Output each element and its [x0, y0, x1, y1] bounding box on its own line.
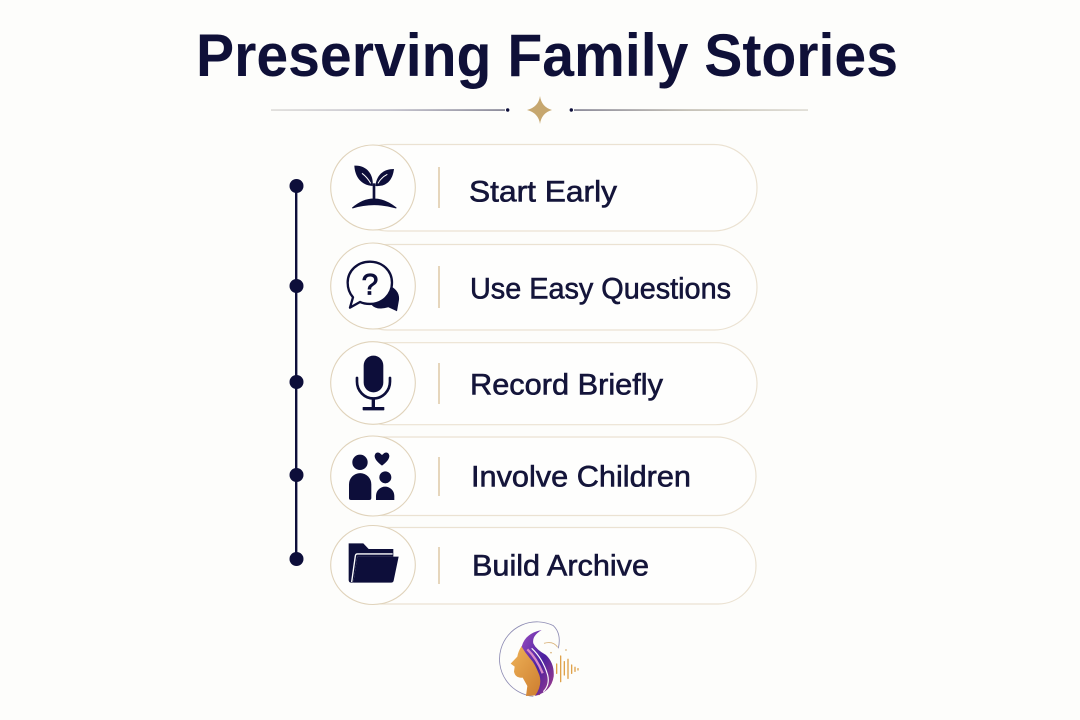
icon: open folder: [349, 543, 399, 583]
timeline: [290, 179, 304, 566]
logo: woman profile with sound wave: [500, 622, 578, 696]
icon: sprout: [352, 166, 396, 208]
step 5: Build Archive: [331, 526, 756, 604]
step 2: Use Easy Questions: [331, 243, 757, 330]
title: Preserving Family Stories: [196, 22, 898, 89]
title divider with star: [271, 96, 808, 124]
label: Record Briefly: Record Briefly: [470, 368, 663, 402]
icon: question speech bubbles: ?: [362, 268, 378, 301]
step 1: Start Early: [331, 144, 757, 231]
label: Involve Children: Involve Children: [471, 460, 691, 494]
step 3: Record Briefly: [331, 342, 757, 425]
icon: question speech bubbles: [348, 262, 399, 311]
icon: microphone: [357, 356, 390, 410]
icon: parent and child with heart: [349, 453, 394, 500]
label: Use Easy Questions: Use Easy Questions: [470, 272, 731, 305]
label: Start Early: Start Early: [469, 176, 617, 208]
step 4: Involve Children: [331, 436, 756, 516]
label: Build Archive: Build Archive: [472, 550, 649, 582]
